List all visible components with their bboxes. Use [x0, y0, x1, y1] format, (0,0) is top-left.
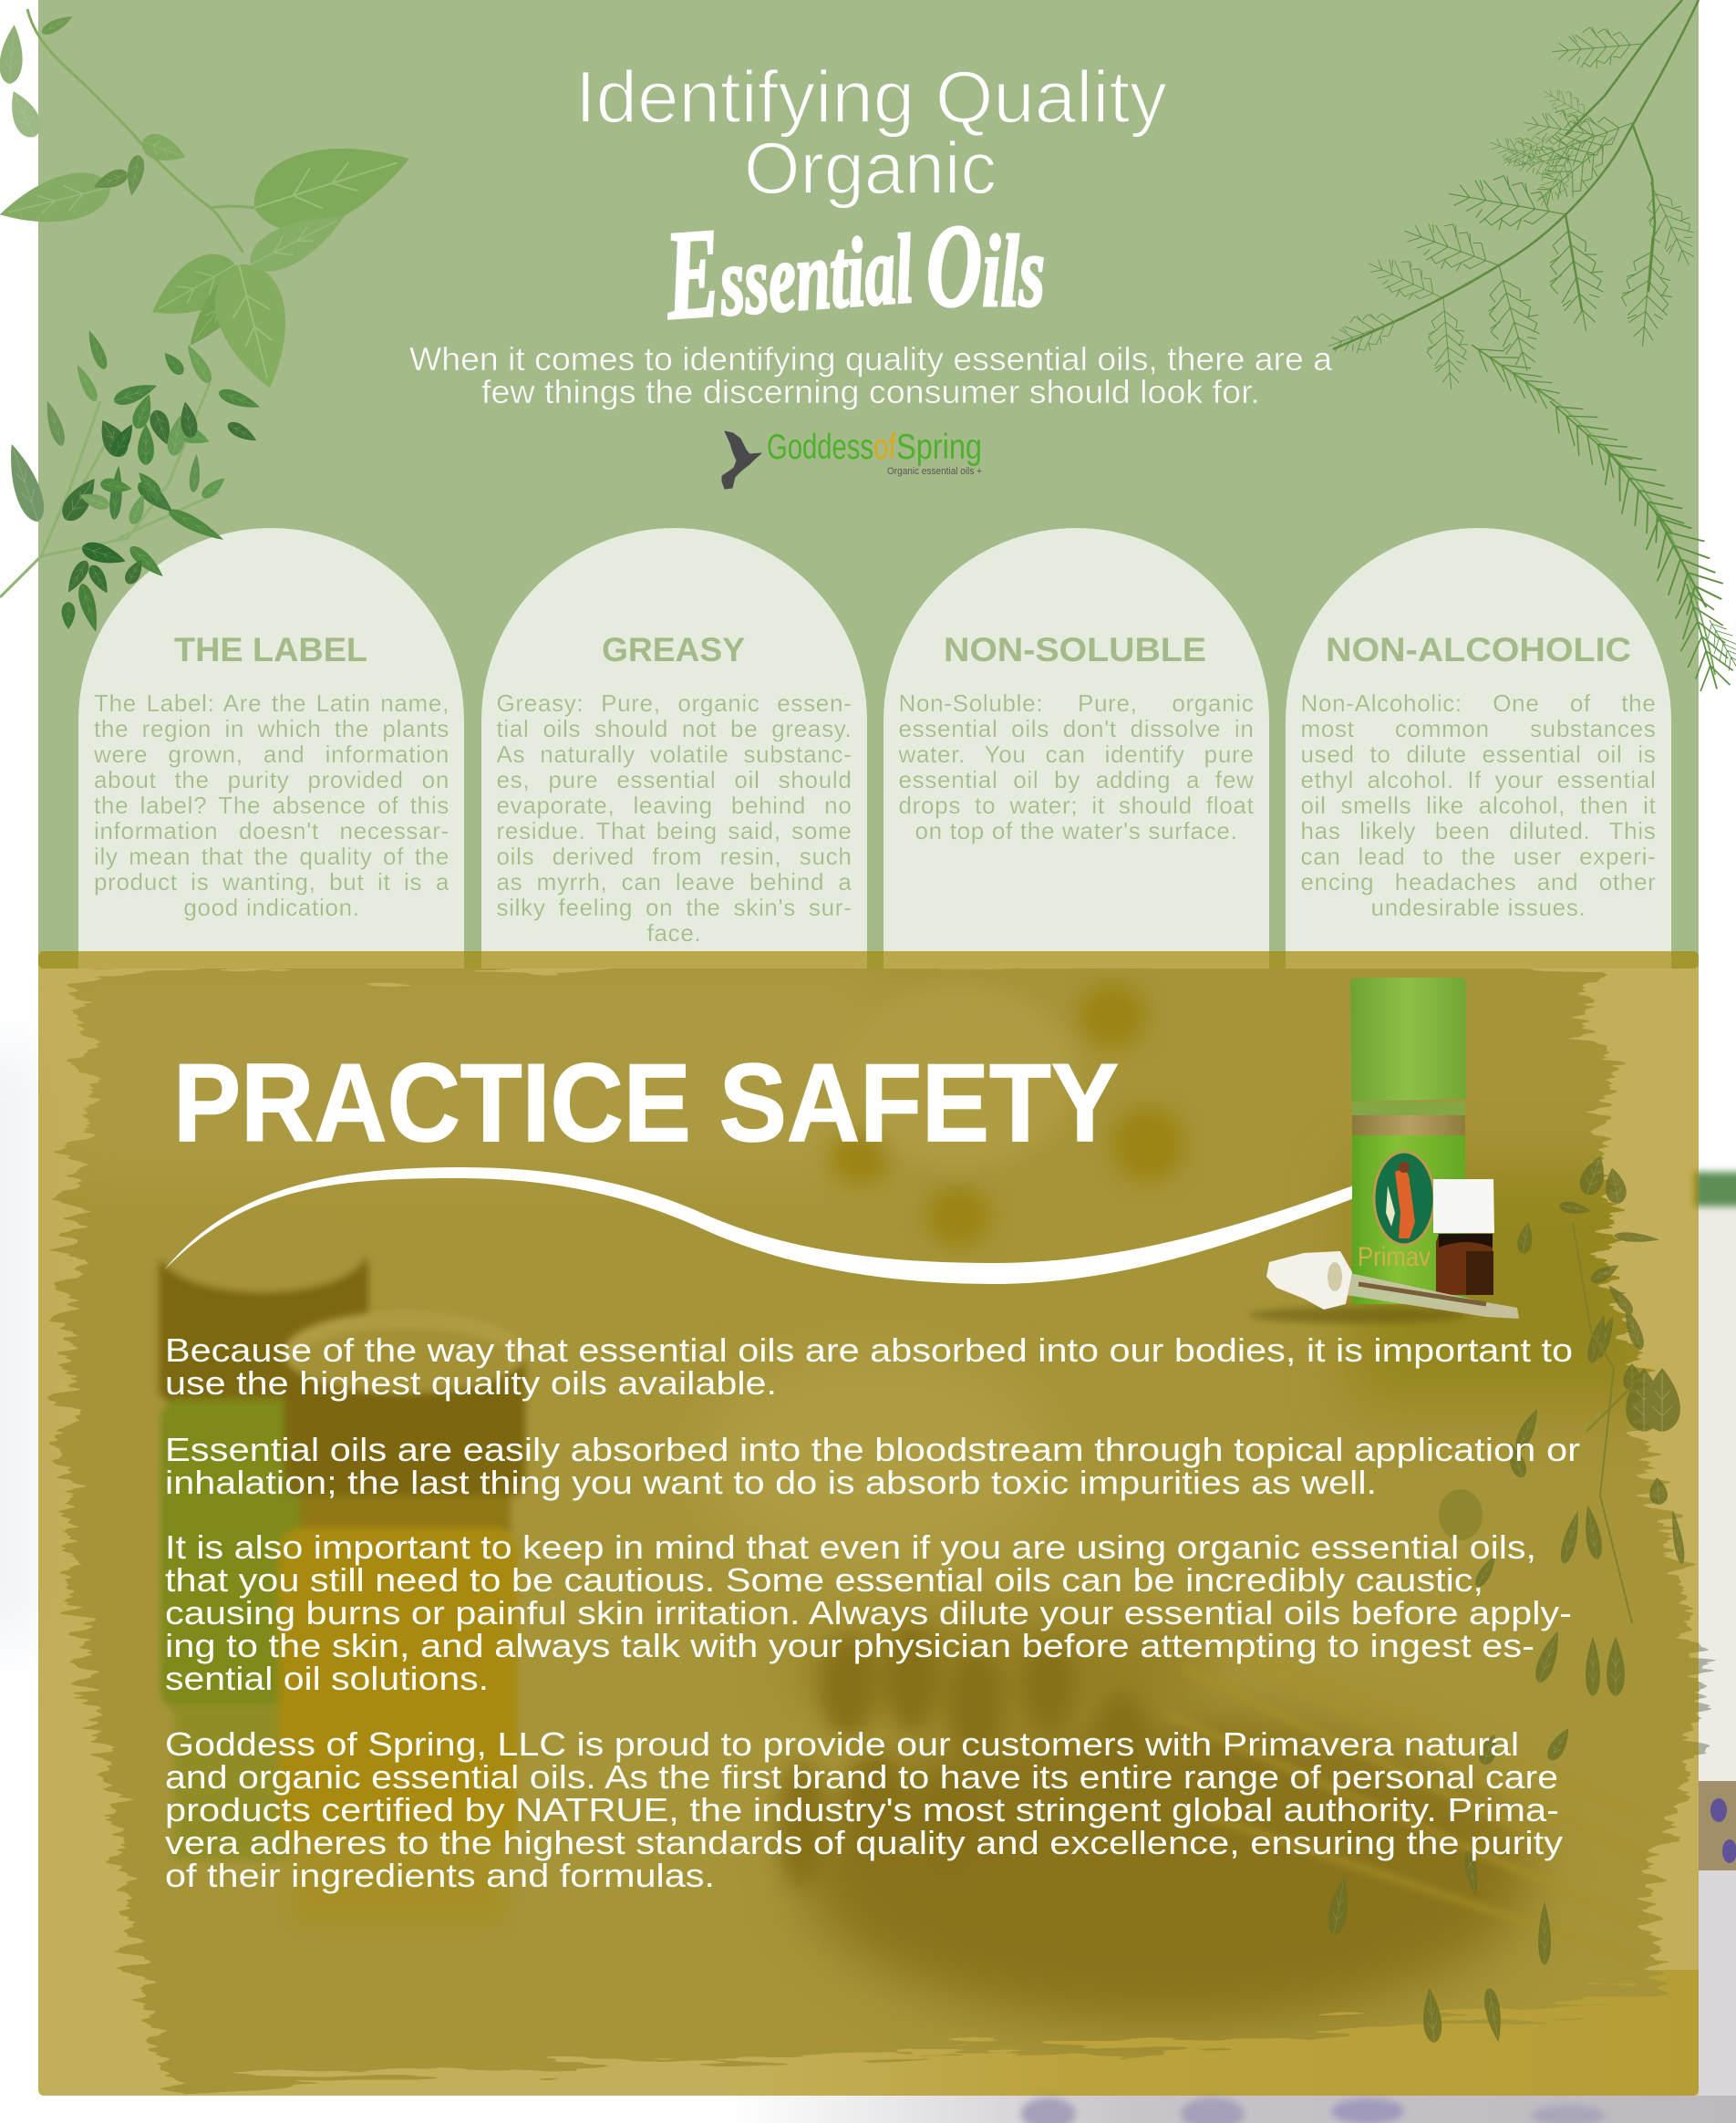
panel: the label card: [78, 528, 464, 968]
logo: goddess of spring: Goddess: [767, 428, 873, 467]
dropper bulb: [1266, 1251, 1352, 1310]
text: paragraph 3: It is also important to keep in mind that even if you are using organic essential oils,: [165, 1528, 1536, 1566]
text: greasy description: As naturally volatile substanc-: [496, 740, 852, 768]
text: paragraph 4: products certified by NATRUE, the industry's most stringent global authority. Prima-: [165, 1791, 1559, 1828]
medallion: [1374, 1152, 1434, 1245]
text: greasy description: silky feeling on the skin's sur-: [496, 894, 852, 921]
text: non-alcoholic description: used to dilute essential oil is: [1300, 740, 1656, 768]
text: paragraph 3: ing to the skin, and always talk with your physician before attempting to ingest es-: [165, 1627, 1534, 1664]
text: non-soluble description: essential oils don't dissolve in: [899, 715, 1255, 742]
logo: goddess of spring: Spring: [896, 428, 982, 467]
product image: primavera bottle with dropper: [1249, 978, 1519, 1323]
text: greasy description: as myrrh, can leave behind a: [496, 868, 852, 896]
amber bottle: [1436, 1234, 1493, 1295]
text: paragraph 2: inhalation; the last thing you want to do is absorb toxic impurities as well.: [165, 1464, 1377, 1501]
photo: white towel: [728, 1370, 1023, 1548]
herb: rosemary sprig right: [1462, 332, 1736, 696]
heading: non-soluble: NON-SOLUBLE: [943, 631, 1205, 668]
dropper glass: [1346, 1272, 1519, 1319]
text: paragraph 1: Because of the way that essential oils are absorbed into our bodies, it is important to: [165, 1331, 1573, 1369]
intro text: When it comes to identifying quality essential oils, there are a: [409, 340, 1333, 378]
brand label: Primav: [1358, 1242, 1431, 1272]
text: non-alcoholic description: has likely been diluted. This: [1300, 817, 1656, 844]
body: [1352, 1102, 1465, 1304]
text: non-soluble description: on top of the water's surface.: [914, 817, 1238, 844]
herb: dill branch top right: [1321, 0, 1708, 391]
text: paragraph 4: vera adheres to the highest standards of quality and excellence, ensuring the purity: [165, 1824, 1563, 1861]
text: greasy description: residue. That being said, some: [496, 817, 852, 844]
text: paragraph 3: sential oil solutions.: [165, 1660, 489, 1697]
text: the label description: the region in which the plants: [94, 715, 450, 742]
text: paragraph 1: [165, 1331, 1573, 1402]
title script: essential oils: Essential: [660, 189, 916, 347]
icon: dove: [722, 431, 761, 489]
text: paragraph 3: [165, 1528, 1572, 1697]
text: non-alcoholic description: ethyl alcohol. If your essential: [1300, 766, 1656, 793]
title: Identifying Quality: [575, 57, 1167, 139]
text: the label description: about the purity provided on: [94, 766, 450, 793]
herb: basil branch top left: [0, 9, 420, 397]
intro text: [409, 340, 1333, 410]
text: paragraph 2: Essential oils are easily absorbed into the bloodstream through topical application or: [165, 1431, 1580, 1468]
text: the label description: ily mean that the quality of the: [94, 843, 450, 870]
text: non-soluble description: essential oil by adding a few: [899, 766, 1255, 793]
text: the label description: information doesn't necessar-: [94, 817, 450, 844]
text: paragraph 1: use the highest quality oils available.: [165, 1364, 777, 1402]
cap: [1350, 978, 1466, 1102]
heading: non-alcoholic: NON-ALCOHOLIC: [1326, 631, 1630, 668]
panel: greasy card: [481, 528, 866, 968]
text: paragraph 4: of their ingredients and formulas.: [165, 1857, 715, 1894]
intro text: few things the discerning consumer should look for.: [481, 373, 1260, 410]
text: non-alcoholic description: most common substances: [1300, 715, 1656, 742]
text: non-soluble description: [899, 689, 1255, 844]
text: paragraph 4: and organic essential oils. As the first brand to have its entire range of personal care: [165, 1758, 1558, 1796]
panel: non-alcoholic card: [1286, 528, 1670, 968]
panel: green header: [38, 0, 1699, 968]
text: greasy description: [496, 689, 852, 947]
text: the label description: the label? The absence of this: [94, 792, 450, 819]
heading: practice safety: PRACTICE SAFETY: [173, 1041, 1119, 1165]
title script: essential oils: Oils: [926, 201, 1045, 332]
text: paragraph 4: [165, 1725, 1563, 1894]
panel: gold practice safety background: [38, 951, 1699, 2096]
text: greasy description: tial oils should not be greasy.: [496, 715, 852, 742]
decorative swoosh: [164, 1167, 1359, 1284]
text: non-alcoholic description: encing headaches and other: [1300, 868, 1656, 896]
photo: front amber bottle: [278, 1311, 525, 1847]
text: non-alcoholic description: [1300, 689, 1656, 921]
photo: greenery right: [1349, 1167, 1659, 1404]
text: greasy description: Greasy: Pure, organic essen-: [496, 689, 852, 717]
logo: goddess of spring: Organic essential oils +: [887, 466, 982, 477]
text: the label description: [94, 689, 450, 921]
background photo behind panels: [0, 968, 1736, 2123]
text: non-soluble description: Non-Soluble: Pure, organic: [899, 689, 1255, 717]
photo inside brush stroke: [47, 968, 1716, 2094]
logo: goddess of spring: of: [873, 428, 896, 467]
logo: goddess of spring: [722, 428, 982, 489]
text: greasy description: evaporate, leaving behind no: [496, 792, 852, 819]
text: the label description: product is wanting, but it is a: [94, 868, 450, 896]
text: the label description: The Label: Are the Latin name,: [94, 689, 450, 717]
text: the label description: were grown, and information: [94, 740, 450, 768]
panel: non-soluble card: [883, 528, 1269, 968]
text: paragraph 4: Goddess of Spring, LLC is proud to provide our customers with Primavera natural: [165, 1725, 1519, 1763]
text: the label description: good indication.: [183, 894, 360, 921]
text: greasy description: oils derived from resin, such: [496, 843, 852, 870]
text: greasy description: es, pure essential oil should: [496, 766, 852, 793]
heading: the label: THE LABEL: [174, 631, 367, 668]
photo: back bottle: [159, 1211, 368, 1860]
outer photo margins: [0, 1049, 1736, 2123]
photo: lavender bundle: [779, 1605, 1650, 2025]
text: paragraph 3: causing burns or painful skin irritation. Always dilute your essential oils before apply-: [165, 1594, 1572, 1631]
text: non-soluble description: water. You can identify pure: [899, 740, 1255, 768]
text: non-alcoholic description: Non-Alcoholic: One of the: [1300, 689, 1656, 717]
heading: greasy: GREASY: [602, 631, 745, 668]
text: greasy description: face.: [647, 919, 701, 947]
text: non-alcoholic description: can lead to the user experi-: [1300, 843, 1656, 870]
text: non-alcoholic description: undesirable issues.: [1371, 894, 1586, 921]
text: paragraph 3: that you still need to be cautious. Some essential oils can be incredibly caustic,: [165, 1561, 1483, 1599]
title: Organic: [744, 128, 997, 210]
herbs over gold panel: [1325, 1152, 1687, 2044]
text: non-soluble description: drops to water; it should float: [899, 792, 1255, 819]
text: non-alcoholic description: oil smells like alcohol, then it: [1300, 792, 1656, 819]
photo: chamomile flowers: [829, 983, 1184, 1248]
herb: oregano sprig: [0, 328, 263, 634]
text: paragraph 2: [165, 1431, 1580, 1501]
title: [575, 57, 1167, 210]
shadow: [1249, 1307, 1468, 1323]
